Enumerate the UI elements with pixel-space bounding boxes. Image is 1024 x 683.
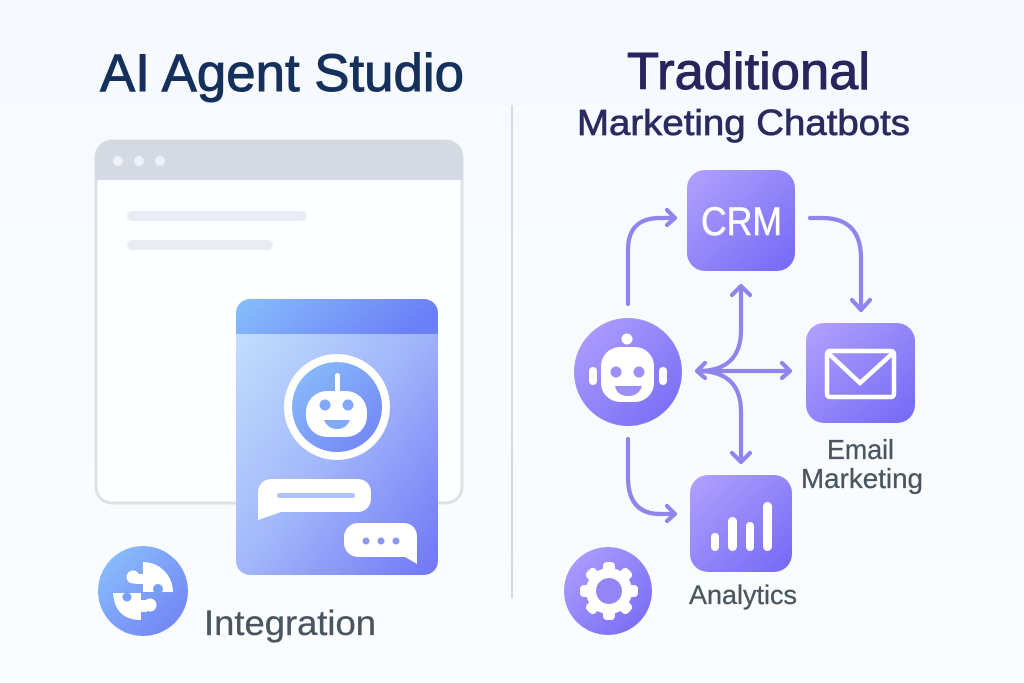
title: Traditional Marketing Chatbots: Traditional bbox=[627, 43, 870, 101]
label: Integration: Integration bbox=[204, 604, 376, 643]
arrow: CRM to email bbox=[810, 218, 870, 310]
arrow: hub left and right bbox=[697, 363, 790, 378]
icon: gear bbox=[564, 547, 652, 635]
icon: integration puzzle bbox=[98, 546, 188, 636]
icon: robot avatar bbox=[288, 358, 386, 456]
box: CRM: CRM bbox=[701, 200, 782, 244]
chat bubble: message bbox=[258, 479, 371, 520]
arrows: connections bbox=[628, 210, 870, 521]
box: CRM bbox=[687, 170, 795, 271]
box: analytics icon bbox=[690, 475, 792, 572]
arrow: robot to CRM bbox=[628, 210, 675, 304]
chat bubble: typing bbox=[344, 523, 417, 564]
arrow: robot to analytics bbox=[628, 439, 675, 521]
title: Traditional Marketing Chatbots bbox=[577, 43, 910, 143]
box: email icon bbox=[806, 323, 915, 423]
arrow: hub to analytics bbox=[698, 371, 750, 462]
panel: browser window bbox=[95, 140, 463, 503]
label: Analytics: Analytics bbox=[689, 580, 797, 610]
panel: chat widget bbox=[236, 299, 438, 575]
arrow: hub to CRM bbox=[698, 286, 750, 371]
title: Traditional Marketing Chatbots: Marketing Chatbots bbox=[577, 102, 910, 143]
label: Email Marketing: Marketing bbox=[801, 463, 923, 494]
title: AI Agent Studio: AI Agent Studio bbox=[100, 44, 464, 103]
icon: robot bbox=[574, 318, 682, 426]
label: Email Marketing: Email bbox=[827, 434, 894, 465]
label: Email Marketing bbox=[801, 434, 923, 494]
